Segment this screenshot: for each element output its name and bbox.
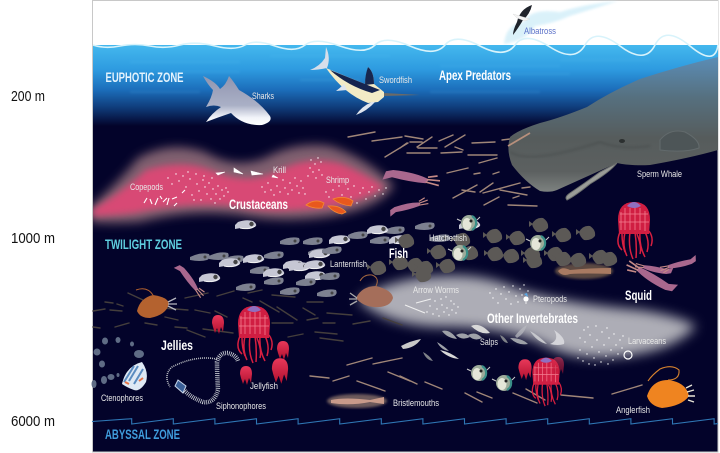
shark (203, 76, 271, 125)
hatchetfish highlighted (448, 215, 549, 391)
dots: crustacean clusters (168, 158, 386, 203)
depth: 200 m: 200 m (11, 88, 45, 105)
label: bristlemouths: Bristlemouths (393, 398, 439, 409)
euphotic zone label: EUPHOTIC ZONE (106, 70, 184, 85)
heading: jellies: Jellies (161, 338, 193, 353)
zone labels (105, 70, 184, 442)
label: larvaceans: Larvaceans (628, 336, 666, 347)
sky with clouds (93, 1, 718, 45)
anglerfish left (136, 289, 177, 318)
large bristlemouth lower (327, 394, 387, 408)
water streaks (130, 56, 650, 92)
abyssal boundary (92, 419, 718, 424)
bristlemouth on whale (508, 133, 530, 146)
large bristlemouth upper (555, 263, 613, 279)
label: sperm whale: Sperm Whale (637, 169, 682, 180)
lower jaw (566, 163, 617, 200)
depth: 6000 m: 6000 m (11, 413, 55, 430)
label: krill: Krill (273, 165, 286, 176)
lanternfish school (190, 220, 480, 297)
siphonophore (167, 353, 238, 402)
label: swordfish: Swordfish (379, 75, 412, 86)
pteropod (523, 293, 529, 302)
salps (401, 325, 564, 361)
depth: 1000 m: 1000 m (11, 230, 55, 247)
heading: squid: Squid (625, 288, 652, 303)
heading: apex predators: Apex Predators (439, 68, 511, 83)
label: arrow worms: Arrow Worms (413, 285, 459, 296)
surface waves (93, 35, 718, 56)
anglerfish centre (349, 275, 393, 307)
label: hatchetfish: Hatchetfish (429, 233, 467, 244)
depth labels (11, 88, 55, 430)
ctenophores (92, 337, 147, 390)
anglerfish right (647, 367, 695, 408)
label: jellyfish: Jellyfish (250, 381, 278, 392)
arrow worm (405, 299, 431, 313)
anglerfish group (136, 275, 695, 408)
other invertebrates glow (358, 276, 696, 358)
label: pteropods: Pteropods (533, 294, 567, 305)
label: copepods: Copepods (130, 182, 163, 193)
eye (619, 139, 625, 143)
label: sharks: Sharks (252, 91, 274, 102)
krill (216, 168, 278, 178)
label: anglerfish: Anglerfish (616, 405, 650, 416)
dots: invertebrate clusters (427, 285, 623, 365)
label: albatross: Albatross (524, 26, 556, 37)
crustaceans glow (90, 145, 394, 223)
label: ctenophores: Ctenophores (101, 393, 143, 404)
larvacean (624, 351, 632, 359)
bristlemouths lower school (310, 358, 642, 403)
label: shrimp: Shrimp (326, 175, 349, 186)
swordfish (310, 47, 420, 115)
bristlemouths dark school (93, 290, 402, 341)
hatchetfish school (367, 218, 617, 282)
euphotic water gradient (93, 45, 718, 126)
sperm whale (508, 57, 718, 200)
jellyfish group (212, 202, 652, 406)
copepods (144, 190, 185, 206)
shrimp (306, 197, 353, 214)
albatross (513, 5, 532, 35)
label: siphonophores: Siphonophores (216, 401, 266, 412)
group headings (161, 68, 652, 353)
abyssal zone label: ABYSSAL ZONE (105, 427, 180, 442)
heading: other invertebrates: Other Invertebrates (487, 311, 578, 326)
heading: fish: Fish (389, 246, 408, 261)
bristlemouths upper school (348, 132, 537, 206)
label: lanternfish: Lanternfish (330, 259, 367, 270)
squid group (171, 170, 698, 298)
heading: crustaceans: Crustaceans (229, 197, 288, 212)
flipper (660, 131, 699, 151)
species labels (101, 26, 682, 416)
label: salps: Salps (480, 337, 498, 348)
twilight zone label: TWILIGHT ZONE (105, 237, 182, 252)
